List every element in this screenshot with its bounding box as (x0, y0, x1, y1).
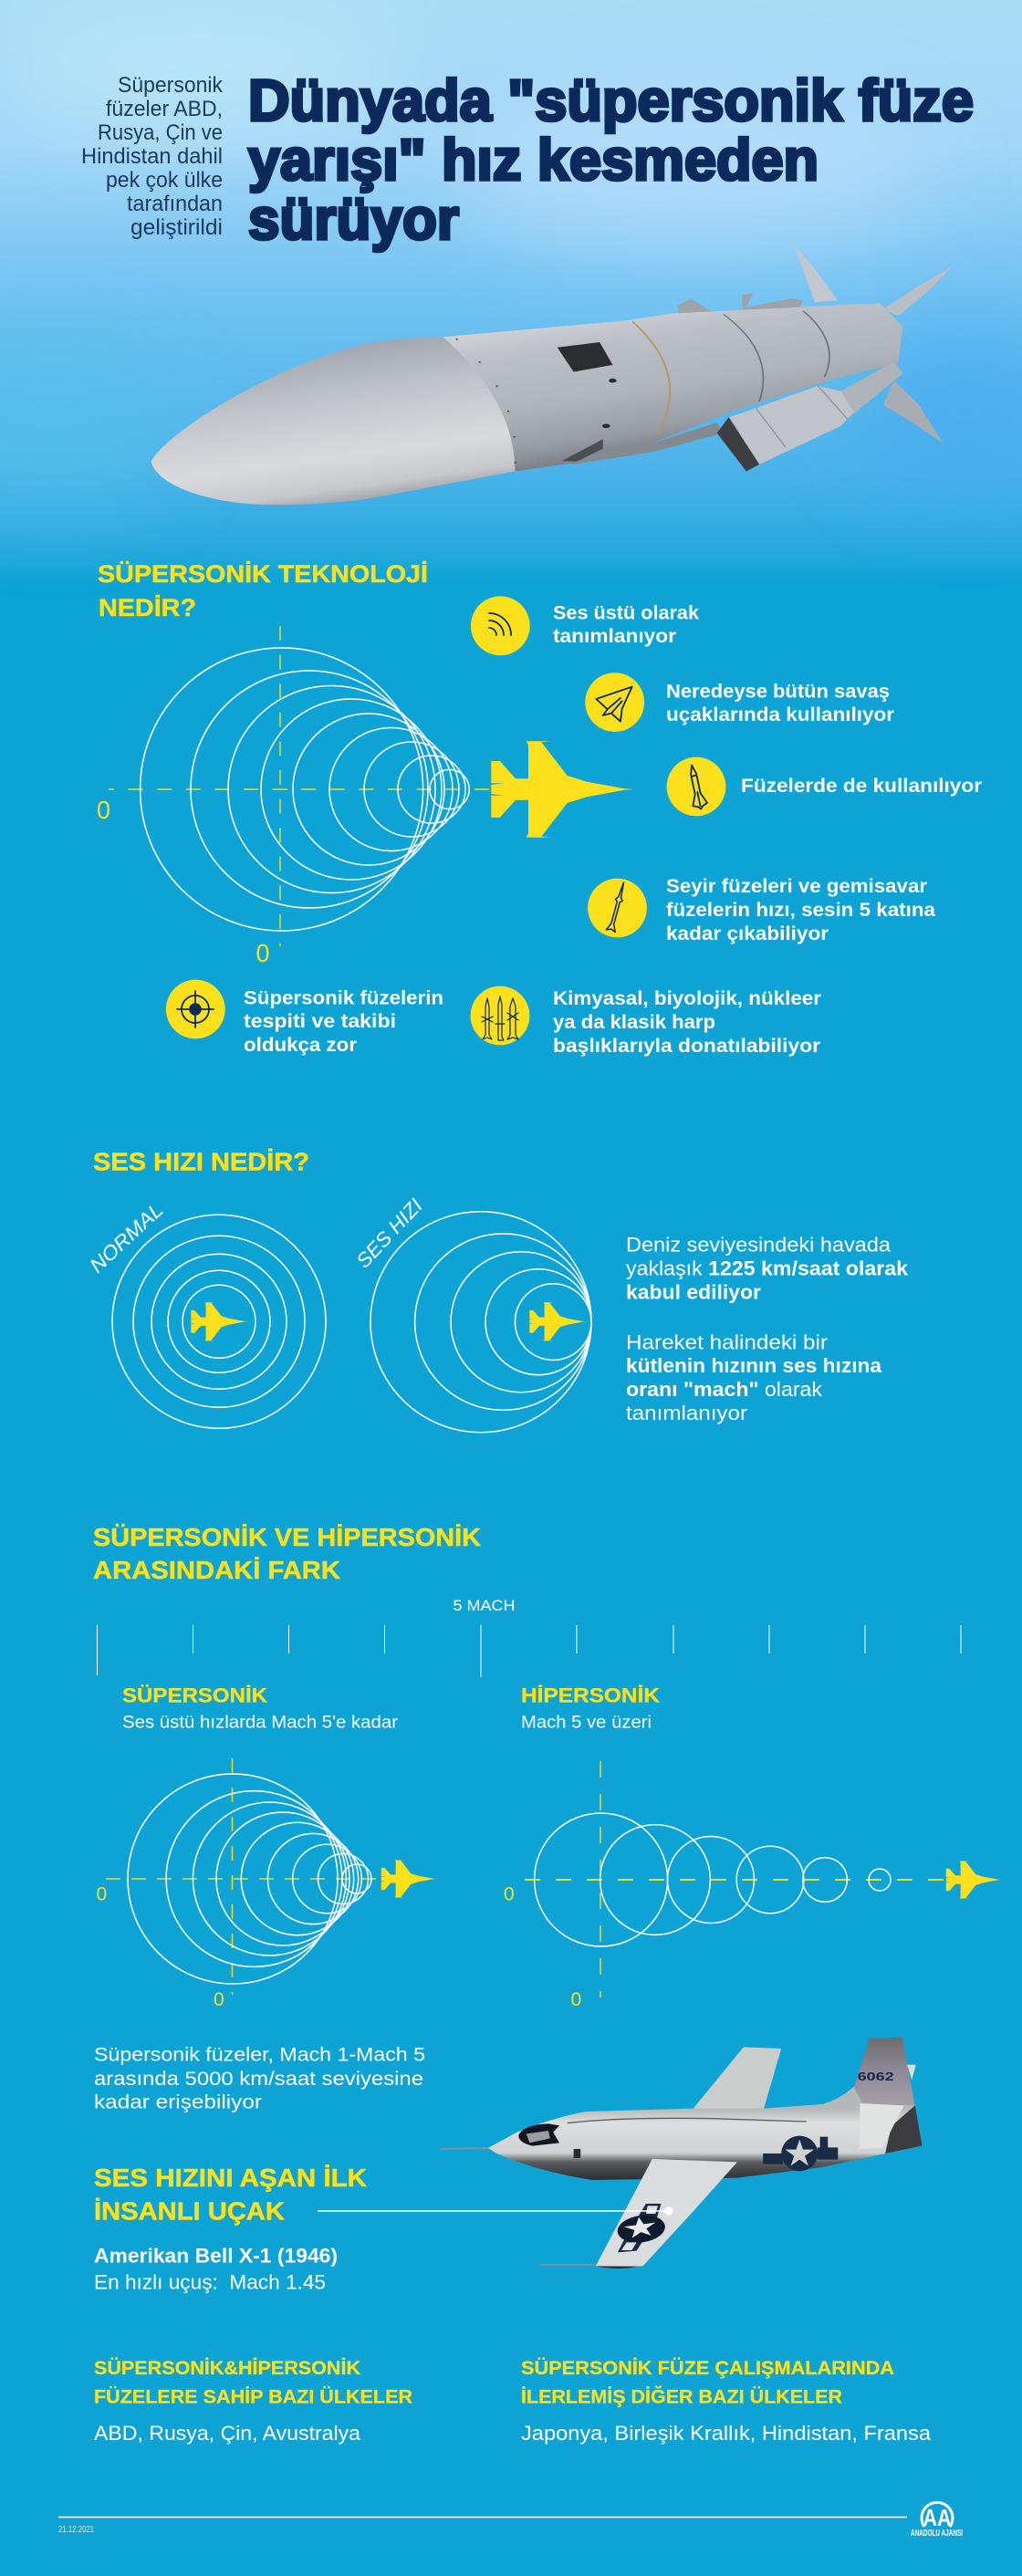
shock wave rings (141, 648, 469, 931)
heading (93, 1523, 481, 1584)
panel: countries with missiles (94, 2358, 412, 2445)
text: description: yaklaşık 1225 km/saat olarak (626, 1257, 909, 1280)
text: mach range: arasında 5000 km/saat seviyesine (94, 2068, 423, 2090)
text: mach range: kadar erişebiliyor (94, 2091, 262, 2113)
hypersonic label (521, 1684, 660, 1732)
text: description (626, 1234, 909, 1424)
text: savaş uçakları (666, 681, 895, 725)
heading: SÜPERSONİK TEKNOLOJİ (98, 560, 428, 588)
panel: bell x-1 (94, 2038, 923, 2294)
zero labels: 0 (256, 939, 270, 967)
text: ses üstü: Ses üstü olarak (553, 602, 699, 624)
intro text: pek çok ülke (106, 168, 223, 193)
heading: SÜPERSONİK VE HİPERSONİK (93, 1523, 481, 1551)
text: başlıklar: ya da klasik harp (553, 1011, 715, 1033)
zero labels: 0 (97, 796, 110, 824)
icon: fighter plane (585, 673, 644, 732)
intro text: geliştirildi (130, 215, 223, 240)
hypersonic label: HİPERSONİK (521, 1684, 660, 1706)
heading (98, 560, 428, 621)
text: tespit (244, 987, 443, 1056)
intro text: füzeler ABD, (106, 97, 223, 121)
text: description: Hareket halindeki bir (626, 1330, 828, 1353)
text: ses üstü: tanımlanıyor (553, 625, 677, 647)
text: plane facts: En hızlı uçuş: Mach 1.45 (94, 2270, 326, 2294)
icon: target (166, 980, 225, 1038)
text: description: Deniz seviyesindeki havada (626, 1234, 892, 1257)
panel: countries with missiles: ABD, Rusya, Çin, Avustralya (94, 2422, 361, 2445)
zero labels (97, 796, 270, 967)
date: 21.12.2021 (58, 2525, 94, 2535)
axes (109, 626, 490, 946)
text: plane facts (94, 2245, 338, 2294)
supersonic label: SÜPERSONİK (122, 1684, 267, 1706)
speed of sound diagram (351, 1194, 591, 1433)
title: sürüyor (248, 186, 459, 252)
hypersonic label: Mach 5 ve üzeri (521, 1714, 652, 1732)
text: description: kabul ediliyor (626, 1280, 761, 1303)
text: plane facts: Amerikan Bell X-1 (1946) (94, 2245, 338, 2267)
intro text: tarafından (127, 192, 223, 216)
text: description: oranı "mach" olarak (626, 1378, 823, 1401)
supersonic diagram: 0 (214, 1989, 224, 2010)
text: başlıklar: Kimyasal, biyolojik, nükleer (553, 987, 822, 1009)
title: Dünyada "süpersonik füze (248, 68, 974, 133)
hypersonic diagram (504, 1761, 1002, 2010)
icon: warheads (471, 986, 529, 1045)
hypersonic diagram: 0 (504, 1883, 515, 1905)
icon: signal (471, 596, 530, 655)
jet (491, 741, 634, 838)
intro text: Hindistan dahil (81, 144, 223, 169)
panel: countries with missiles: SÜPERSONİK&HİPERSONİK (94, 2358, 360, 2379)
panel: other countries: İLERLEMİŞ DİĞER BAZI ÜLKELER (521, 2385, 842, 2407)
speed of sound diagram: SES HIZI (351, 1194, 427, 1272)
text: description: kütlenin hızının ses hızına (626, 1354, 882, 1377)
text: tespit: Süpersonik füzelerin (244, 987, 443, 1009)
text: seyir füzeleri: kadar çıkabiliyor (666, 923, 829, 944)
heading: NEDİR? (99, 594, 196, 621)
text: mach range: Süpersonik füzeler, Mach 1-Mach 5 (94, 2044, 425, 2066)
text: seyir füzeleri: Seyir füzeleri ve gemisavar (666, 875, 928, 897)
panel: supersonic technology (97, 560, 983, 1057)
heading: İNSANLI UÇAK (94, 2197, 285, 2225)
logo: ANADOLU AJANSI (911, 2529, 963, 2539)
text: description: tanımlanıyor (626, 1402, 747, 1424)
normal diagram (85, 1198, 326, 1428)
text: tespit: tespiti ve takibi (244, 1010, 396, 1032)
title (248, 68, 974, 252)
mach scale: 5 MACH (453, 1597, 515, 1614)
text: seyir füzeleri (666, 875, 936, 944)
panel: other countries (521, 2358, 932, 2445)
text: ses üstü (553, 602, 699, 647)
panel: countries with missiles: FÜZELERE SAHİP BAZI ÜLKELER (94, 2387, 412, 2407)
footer (58, 2502, 963, 2539)
callout line (318, 2206, 673, 2216)
supersonic label (122, 1684, 399, 1732)
icon: missile (667, 757, 725, 816)
text: seyir füzeleri: füzelerin hızı, sesin 5 katına (666, 899, 936, 921)
plane illustration: 6062 (858, 2070, 894, 2083)
text: savaş uçakları: Neredeyse bütün savaş (666, 681, 890, 703)
logo: AA (923, 2504, 952, 2531)
missile illustration (151, 245, 954, 505)
logo (911, 2502, 963, 2539)
intro text (81, 73, 224, 240)
supersonic diagram: 0 (97, 1883, 107, 1905)
panel: speed of sound (85, 1148, 909, 1433)
icon: cruise missile (588, 879, 647, 937)
heading (94, 2164, 367, 2225)
text: mach range (94, 2044, 425, 2113)
heading: ARASINDAKİ FARK (93, 1556, 340, 1584)
text: füzeler: Füzelerde de kullanılıyor (741, 775, 983, 797)
supersonic diagram (97, 1758, 437, 2010)
intro text: Süpersonik (118, 73, 224, 98)
panel: other countries: SÜPERSONİK FÜZE ÇALIŞMALARINDA (521, 2358, 894, 2379)
supersonic label: Ses üstü hızlarda Mach 5'e kadar (122, 1714, 399, 1732)
hypersonic diagram: 0 (571, 1989, 581, 2010)
heading: SES HIZI NEDİR? (93, 1148, 309, 1175)
heading: SES HIZINI AŞAN İLK (94, 2164, 367, 2192)
plane illustration (441, 2038, 923, 2268)
text: başlıklar: başlıklarıyla donatılabiliyor (553, 1035, 821, 1057)
panel: other countries: Japonya, Birleşik Krallık, Hindistan, Fransa (521, 2422, 932, 2445)
text: savaş uçakları: uçaklarında kullanılıyor (666, 704, 895, 725)
panel: supersonic vs hypersonic (93, 1523, 1002, 2113)
intro text: Rusya, Çin ve (98, 120, 223, 145)
text: tespit: oldukça zor (244, 1034, 358, 1056)
title: yarışı" hız kesmeden (248, 127, 819, 193)
normal diagram: NORMAL (85, 1198, 168, 1278)
text: başlıklar (553, 987, 822, 1057)
